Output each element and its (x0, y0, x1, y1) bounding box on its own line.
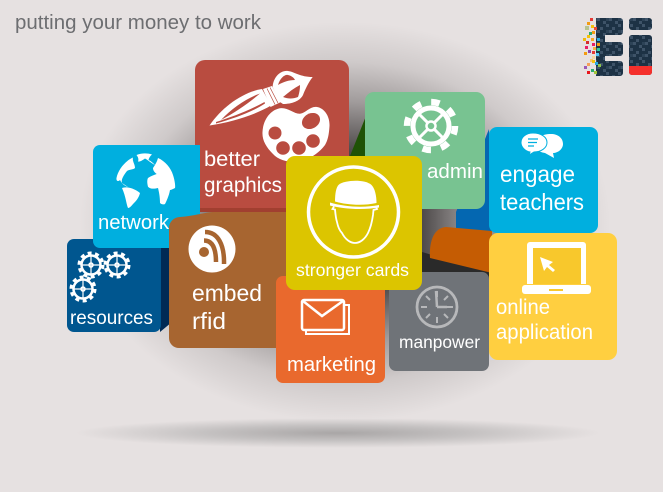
logo (583, 18, 652, 76)
label: network: network (98, 212, 170, 234)
icon: envelope (302, 300, 349, 334)
label: better graphics (204, 148, 282, 197)
tile: admin (365, 92, 485, 209)
dark wedge (422, 252, 490, 290)
label: engage teachers: engage (500, 161, 575, 187)
orange ribbon (430, 227, 492, 273)
label: embed rfid (192, 280, 262, 334)
icon: palette (262, 107, 330, 162)
label: online application: online (496, 295, 550, 319)
label: engage teachers: teachers (500, 189, 584, 215)
gap shadow between tiles (420, 205, 460, 265)
label: marketing: marketing (287, 353, 376, 376)
title: putting your money to work (15, 12, 262, 34)
tile: manpower (389, 272, 489, 371)
tile: resources (67, 239, 172, 332)
icon: laptop (522, 242, 591, 294)
central drop shadow (80, 22, 610, 422)
tile: network (93, 145, 200, 248)
label: engage teachers (500, 161, 584, 215)
label: better graphics: better (204, 148, 260, 171)
label: manpower: manpower (399, 332, 480, 352)
icon: globe (116, 153, 175, 208)
icon: gears (71, 253, 129, 301)
icon: paintbrush (210, 71, 313, 126)
label: embed rfid: embed (192, 280, 262, 306)
icon: gear (407, 102, 455, 150)
label: online application (496, 295, 593, 344)
label: admin: admin (427, 161, 483, 183)
tile: engage teachers (489, 127, 598, 233)
icon: hard hat in circle (308, 167, 398, 257)
tile: marketing (276, 276, 385, 383)
tile: embed rfid (169, 212, 290, 348)
floor shadow (76, 418, 600, 448)
label: better graphics: graphics (204, 174, 282, 197)
tile: better graphics (195, 60, 349, 212)
label: embed rfid: rfid (192, 308, 226, 334)
tile: stronger cards (286, 156, 422, 290)
icon: speech bubbles (521, 133, 563, 158)
blue side face of engage tile (456, 129, 492, 234)
icon: clock (417, 287, 457, 327)
label: stronger cards: stronger cards (296, 260, 409, 280)
icon: rss (188, 226, 236, 272)
label: online application: application (496, 320, 593, 344)
tile: online application (489, 233, 617, 360)
dark green side face (350, 116, 366, 158)
label: resources: resources (70, 307, 153, 329)
